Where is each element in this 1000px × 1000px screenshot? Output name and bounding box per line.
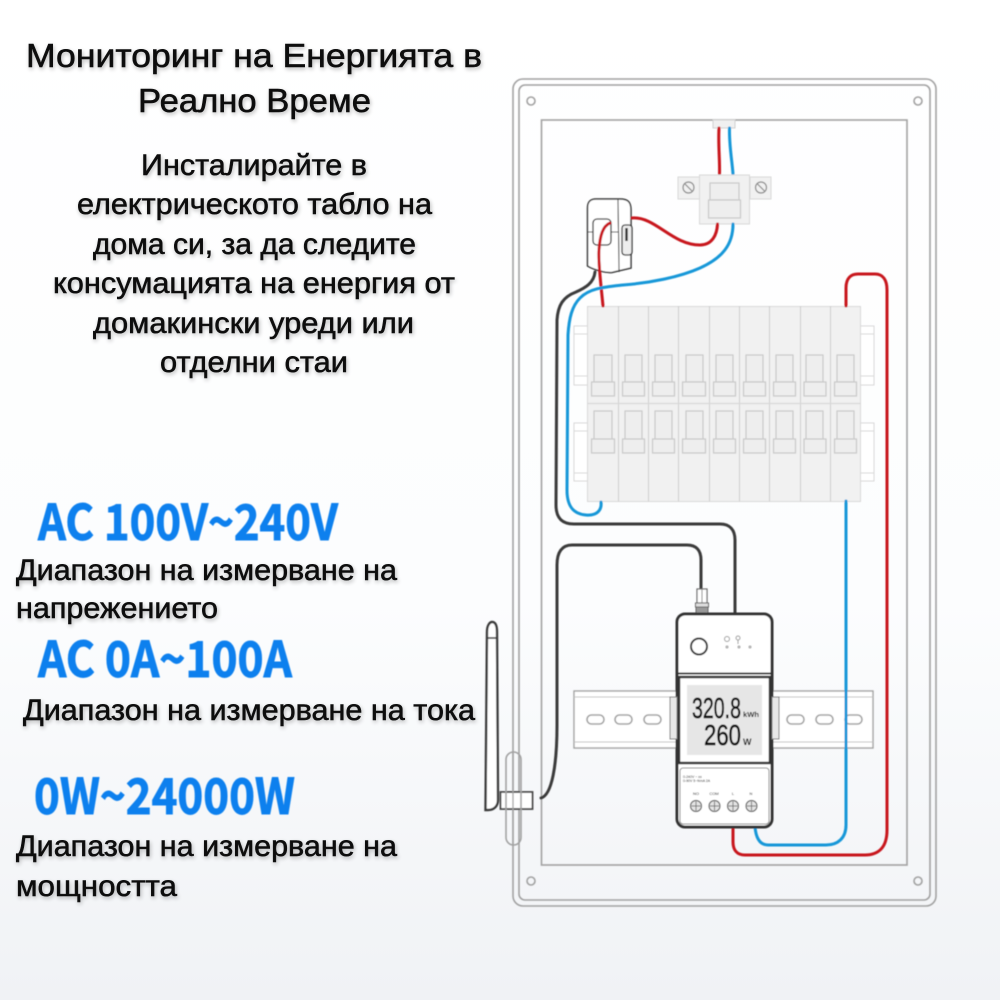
text block: installation description: Инсталирайте в — [141, 149, 367, 182]
spec: current range: AC 0A~100A — [37, 621, 293, 692]
wires: red live — [599, 218, 887, 855]
meter terminals: NO — [693, 791, 699, 796]
spec: voltage range: Диапазон на измерване на — [16, 554, 397, 587]
text block: installation description: домакински уреди или — [93, 307, 414, 340]
meter display — [679, 677, 770, 763]
antenna connector — [696, 589, 708, 613]
wires: top feed — [713, 120, 735, 174]
spec: power range: мощността — [16, 870, 177, 903]
meter display: 320.8 — [692, 693, 741, 725]
din clips — [670, 697, 779, 739]
spec: current range — [23, 621, 475, 727]
title: Реално Време — [138, 82, 371, 119]
text block: installation description: дома си, за да следите — [93, 228, 416, 261]
meter terminals: COM — [709, 791, 719, 796]
current transformer clamp — [588, 199, 632, 273]
meter terminals: N — [750, 791, 753, 796]
meter terminals: 0-90V 5~NmA 2A — [683, 779, 711, 783]
energy meter device — [670, 614, 779, 827]
text block: installation description: консумацията на енергия от — [53, 267, 455, 300]
spec: power range — [16, 758, 397, 903]
circuit breakers — [587, 306, 860, 502]
meter terminals: 0-240V ~ xx — [683, 775, 702, 779]
meter terminals: L — [732, 791, 735, 796]
wiring diagram — [486, 79, 936, 906]
wires: blue neutral — [567, 224, 846, 845]
spec: voltage range — [16, 484, 397, 625]
text block: installation description: електрическото табло на — [77, 188, 432, 221]
spec: voltage range: AC 100V~240V — [37, 484, 339, 555]
breaker rail brackets — [574, 326, 874, 481]
din rail — [574, 691, 873, 748]
meter status LEDs — [724, 636, 751, 648]
text block: installation description: отделни стаи — [160, 346, 348, 379]
panel: electrical cabinet — [513, 79, 936, 906]
meter display: kWh — [743, 710, 759, 719]
antenna — [486, 622, 532, 845]
meter terminals — [680, 768, 769, 824]
spec: power range: 0W~24000W — [34, 758, 295, 829]
text block: installation description — [53, 149, 455, 379]
title — [26, 37, 482, 119]
spec: current range: Диапазон на измерване на тока — [23, 694, 475, 727]
spec: power range: Диапазон на измерване на — [16, 830, 397, 863]
meter display: 260 — [704, 720, 741, 752]
meter button — [691, 638, 707, 654]
meter display: W — [743, 737, 752, 747]
title: Мониторинг на Енергията в — [26, 37, 482, 74]
terminal block — [678, 175, 771, 224]
spec: voltage range: напрежението — [16, 592, 218, 625]
wires: black signal — [541, 272, 735, 798]
